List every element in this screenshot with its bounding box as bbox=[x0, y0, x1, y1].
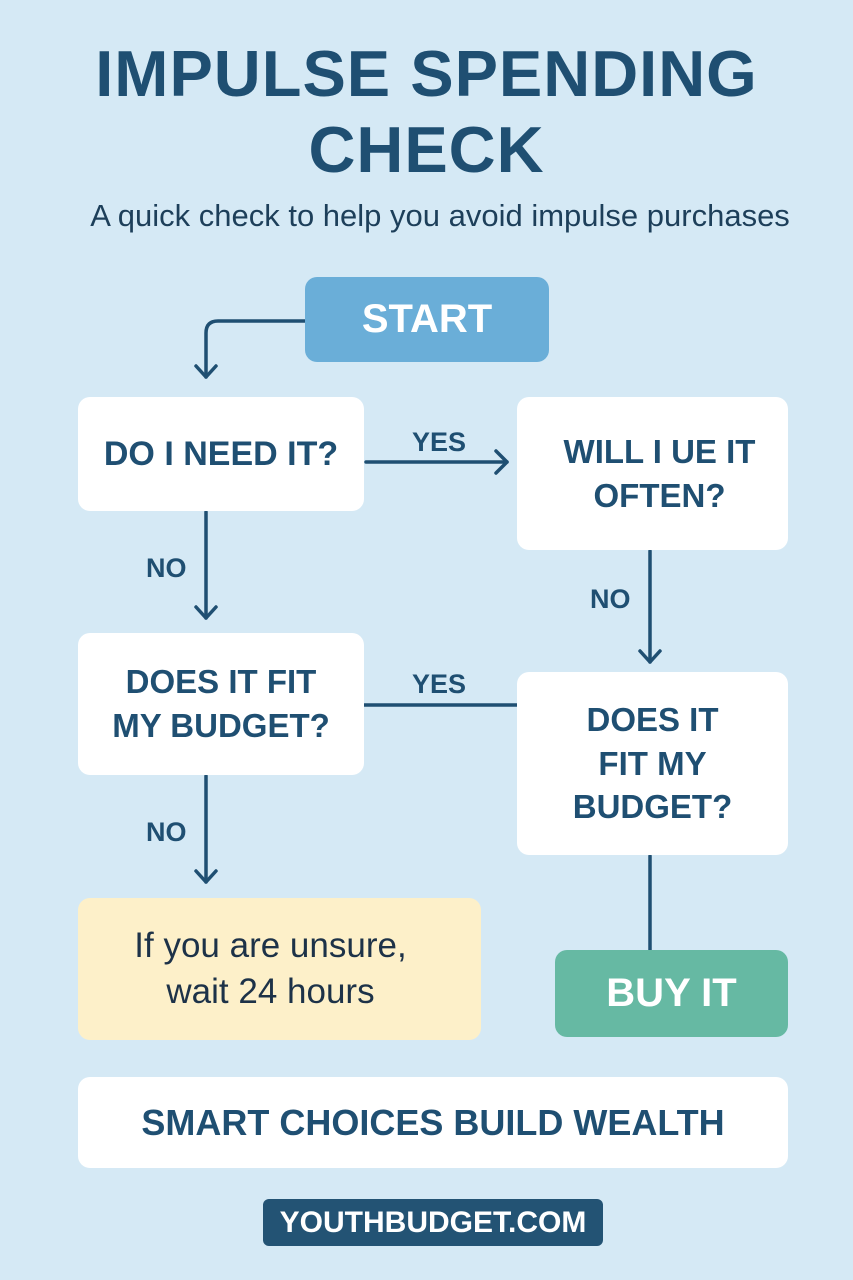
title: CHECK bbox=[308, 113, 545, 186]
footer url: YOUTHBUDGET.COM bbox=[280, 1206, 586, 1239]
buy it box bbox=[555, 950, 788, 1037]
box: fits budget right: BUDGET? bbox=[573, 788, 732, 825]
box: fits budget right bbox=[517, 672, 788, 855]
label no 3: NO bbox=[146, 817, 186, 847]
label no 2: NO bbox=[590, 584, 630, 614]
box: will i use it often bbox=[517, 397, 788, 550]
start box bbox=[305, 277, 549, 362]
subtitle: A quick check to help you avoid impulse purchases bbox=[90, 198, 790, 233]
callout: wait 24 hours: If you are unsure, bbox=[134, 926, 407, 965]
callout: wait 24 hours bbox=[78, 898, 481, 1040]
buy it box: BUY IT bbox=[606, 971, 737, 1015]
start box: START bbox=[362, 297, 492, 341]
title bbox=[95, 37, 758, 186]
box: fits budget left: DOES IT FIT bbox=[126, 663, 316, 700]
box: do i need it bbox=[78, 397, 364, 511]
box: will i use it often: OFTEN? bbox=[594, 476, 725, 514]
banner: smart choices bbox=[78, 1077, 788, 1168]
banner: smart choices: SMART CHOICES BUILD WEALTH bbox=[141, 1102, 725, 1143]
box: fits budget right: FIT MY bbox=[598, 745, 707, 782]
box: fits budget right: DOES IT bbox=[586, 701, 719, 738]
label no 1: NO bbox=[146, 553, 186, 583]
title: IMPULSE SPENDING bbox=[95, 37, 758, 110]
box: do i need it: DO I NEED IT? bbox=[104, 435, 338, 473]
label yes 1: YES bbox=[412, 427, 466, 457]
box: will i use it often: WILL I UE IT bbox=[564, 433, 755, 470]
box: fits budget left bbox=[78, 633, 364, 775]
label yes 2: YES bbox=[412, 669, 466, 699]
box: fits budget left: MY BUDGET? bbox=[112, 707, 330, 744]
callout: wait 24 hours: wait 24 hours bbox=[166, 972, 375, 1011]
footer url bbox=[263, 1199, 603, 1246]
